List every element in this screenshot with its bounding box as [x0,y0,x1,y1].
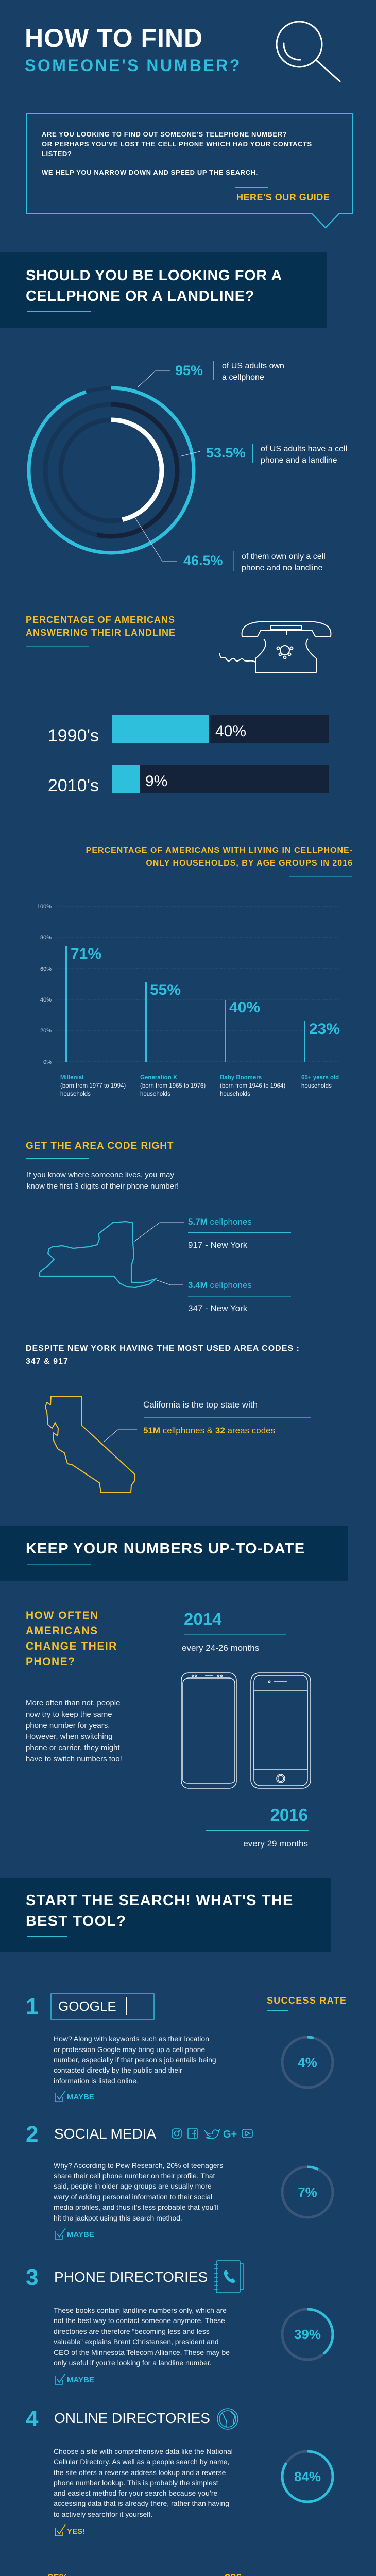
tool 4: online directories: YES! [67,2527,85,2536]
tool 4: online directories: Choose a site with comprehensive data like the National [54,2447,233,2455]
callout: 53.5%: of US adults have a cell [261,445,347,453]
callout: 95%: 95% [175,363,203,378]
heading: area code: GET THE AREA CODE RIGHT [26,1141,174,1151]
icon: magnifier [277,22,340,81]
bar chart: landline answering: 1990's [48,726,99,745]
title [25,24,242,75]
tool 4: online directories: phone number lookup. This is probably the simplest [54,2479,218,2487]
bar chart: landline answering: 2010's [48,776,99,795]
chart: age groups: 71% [71,945,101,962]
heading: area code: know the first 3 digits of their phone number! [27,1182,179,1191]
tool 3: phone directories: only useful if you’re looking for a landline number. [54,2359,212,2367]
tool 4: online directories: 4 [26,2406,39,2431]
map: New York [40,1222,156,1287]
heading: area code: If you know where someone lives, you may [27,1171,174,1179]
callout: 46.5%: of them own only a cell [242,552,326,561]
heading: how often change phone: CHANGE THEIR [26,1640,117,1652]
callout: California: 51M cellphones & 32 areas codes [143,1426,275,1435]
ring: 4%: 4% [298,2055,317,2070]
tool 3: phone directories: directories are therefore “becoming less and less [54,2327,210,2335]
callout: 917: 5.7M cellphones [188,1217,252,1227]
stat: 2014 [182,1609,286,1653]
heading: despite new york: DESPITE NEW YORK HAVING THE MOST USED AREA CODES : [26,1344,300,1353]
icon: phone book [214,2261,243,2293]
tool 2: social media: hit the jackpot using this search method. [54,2214,182,2222]
ring: 7% [282,2167,333,2217]
ring: 39% [282,2309,333,2360]
callout: 46.5% [135,518,326,572]
chart: age groups: 0% [43,1059,52,1065]
tool 3: phone directories: PHONE DIRECTORIES [54,2269,208,2285]
chart: age groups: 20% [40,1028,52,1034]
intro callout box: HERE'S OUR GUIDE [236,192,330,202]
tool 1: google: or profession Google may bring up a cell phone [54,2045,205,2054]
callout: 917 [134,1217,291,1250]
intro callout box: LISTED? [42,150,72,158]
tool 2: social media: media profiles, and thus it’s less probable that you’ll [54,2203,218,2211]
callout: 95%: of US adults own [222,362,284,370]
tool 1: google [26,1994,216,2102]
ring: 7%: 7% [298,2184,317,2200]
chart: age groups: 65+ years old [301,1075,339,1081]
chart: age groups: Baby Boomers [220,1075,262,1081]
chart: age groups: 80% [40,935,52,941]
heading: answering landline [26,615,176,646]
stat: 2014: every 24-26 months [182,1643,259,1653]
section header: cellphone or landline: SHOULD YOU BE LOOKING FOR A [26,267,282,284]
heading: area code [26,1141,179,1191]
callout: 53.5% [180,444,347,465]
chart: age groups: (born from 1977 to 1994) [60,1083,126,1089]
chart: age groups: 40% [40,997,52,1003]
bar chart: landline answering: 9% [145,773,167,790]
tool 4: online directories: Cellular Directory. As well as a people search by name, [54,2458,229,2466]
chart: age groups: households [60,1091,91,1097]
title: HOW TO FIND [25,24,203,53]
tool 3: phone directories: MAYBE [67,2376,94,2384]
callout: 347: 347 - New York [188,1303,248,1313]
heading: despite new york [26,1344,300,1366]
section header: cellphone or landline [0,252,327,328]
tool 2: social media: G+ [223,2129,237,2140]
stat: 2016: every 29 months [243,1839,308,1849]
tool 3: phone directories: not the best way to contact someone anymore. These [54,2316,225,2325]
tool 2: social media: SOCIAL MEDIA [54,2126,156,2142]
section header: keep numbers up-to-date: KEEP YOUR NUMBERS UP-TO-DATE [26,1540,305,1557]
tool 1: google: information is listed online. [54,2077,139,2085]
tool 2: social media: Why? According to Pew Research, 20% of teenagers [54,2161,223,2170]
tool 1: google: contacted directly by the public and their [54,2066,182,2074]
text block: keep number: However, when switching [26,1732,112,1741]
tool 2: social media [26,2122,252,2239]
tool 2: social media: MAYBE [67,2230,94,2239]
callout: 53.5%: 53.5% [206,445,246,461]
tool 2: social media: 2 [26,2122,38,2147]
heading: how often change phone: AMERICANS [26,1625,98,1637]
ring: 84%: 84% [294,2469,321,2484]
chart: age groups: 23% [309,1021,340,1038]
callout: California [104,1400,311,1442]
ring: 39%: 39% [294,2327,321,2342]
tool 4: online directories: to actively searchfor it yourself. [54,2510,152,2518]
tool 3: phone directories: CEO of the Minnesota Telecom Alliance. These may be [54,2348,230,2357]
chart: age groups: households [220,1091,250,1097]
heading: how often change phone: PHONE? [26,1656,76,1668]
tool 4: online directories [26,2406,238,2536]
text block: keep number [26,1699,122,1764]
tool 1: google: GOOGLE [58,1998,116,2014]
section header: start the search [0,1878,331,1952]
tool 3: phone directories: valuable” explains Brent Christensen, president and [54,2337,219,2346]
map: California [45,1396,135,1493]
ring chart: phone ownership [29,388,194,553]
bar chart: landline answering [48,715,329,795]
heading: answering landline: ANSWERING THEIR LANDLINE [26,628,176,638]
tool 4: online directories: accessing data that is already there, rather than having [54,2499,229,2507]
chart: age groups: (born from 1965 to 1976) [140,1083,206,1089]
text block: keep number: More often than not, people [26,1699,120,1707]
callout: 917: 917 - New York [188,1240,248,1250]
tool 4: online directories: the site offers a reverse address lookup and a reverse [54,2468,226,2477]
tool 3: phone directories: 3 [26,2265,38,2290]
tool 2: social media: share their cell phone number on their profile. That [54,2172,215,2180]
callout: 95%: a cellphone [222,373,264,382]
heading: success rate: SUCCESS RATE [267,1995,347,2006]
icon: globe [217,2409,238,2429]
icon: smartphones [181,1673,311,1788]
callout: 347: 3.4M cellphones [188,1280,252,1290]
heading: cellphone-only households: PERCENTAGE OF AMERICANS WITH LIVING IN CELLPHONE- [86,846,353,855]
stat: 2016: 2016 [270,1805,308,1824]
chart: age groups: 55% [150,981,181,998]
heading: despite new york: 347 & 917 [26,1357,69,1366]
tool 3: phone directories: These books contain landline numbers only, which are [54,2306,227,2314]
tool 4: online directories: and easiest method for your search because you’re [54,2489,218,2497]
icons: social networks [172,2128,252,2139]
chart: age groups: households [301,1083,332,1089]
callout: 46.5%: 46.5% [183,553,223,568]
text block: keep number: now try to keep the same [26,1710,112,1719]
section header: start the search: BEST TOOL? [26,1913,126,1929]
chart: age groups: (born from 1946 to 1964) [220,1083,285,1089]
intro callout box: ARE YOU LOOKING TO FIND OUT SOMEONE'S TELEPHONE NUMBER? [42,130,287,138]
bar chart: landline answering: 40% [215,723,246,740]
chart: age groups: households [140,1091,170,1097]
text block: keep number: have to switch numbers too! [26,1755,122,1764]
heading: how often change phone [26,1609,117,1668]
title: SOMEONE'S NUMBER? [25,56,242,75]
tool 2: social media: said, people in older age groups are usually more [54,2182,212,2190]
chart: age groups: 60% [40,966,52,972]
text block: keep number: phone number for years. [26,1721,110,1730]
section header: keep numbers up-to-date [0,1526,348,1581]
heading: answering landline: PERCENTAGE OF AMERICANS [26,615,175,625]
heading: cellphone-only households: ONLY HOUSEHOLDS, BY AGE GROUPS IN 2016 [146,859,353,868]
callout: 347 [157,1280,291,1313]
ring: 84% [282,2451,333,2502]
callout: 53.5%: phone and a landline [261,456,337,465]
heading: how often change phone: HOW OFTEN [26,1609,99,1621]
ring: 4% [282,2037,333,2088]
chart: age groups [37,904,340,1097]
intro callout box: OR PERHAPS YOU'VE LOST THE CELL PHONE WHICH HAD YOUR CONTACTS [42,140,312,148]
text block: keep number: phone or carrier, they might [26,1743,120,1752]
tool 1: google: 1 [26,1994,38,2019]
chart: age groups: 40% [229,999,260,1016]
intro callout box: WE HELP YOU NARROW DOWN AND SPEED UP THE SEARCH. [42,168,258,176]
callout: 46.5%: phone and no landline [242,564,323,572]
callout: California: California is the top state with [143,1400,258,1410]
heading: cellphone-only households [86,846,353,877]
chart: age groups: Generation X [140,1075,177,1081]
tool 1: google: How? Along with keywords such as their location [54,2035,209,2043]
intro callout box [26,114,352,228]
stat: 2016 [206,1805,309,1849]
tool 1: google: MAYBE [67,2093,94,2102]
section header: cellphone or landline: CELLPHONE OR A LANDLINE? [26,288,254,304]
tool 1: google: number, especially if that person’s job entails being [54,2056,216,2064]
chart: age groups: 100% [37,904,52,910]
section header: start the search: START THE SEARCH! WHAT'S THE [26,1892,294,1909]
tool 3: phone directories [26,2261,243,2384]
stat: 2014: 2014 [184,1609,222,1629]
tool 2: social media: wary of adding personal information to their social [53,2193,212,2201]
chart: age groups: Millenial [60,1075,83,1081]
icon: rotary telephone [219,621,331,672]
callout: 95% [138,361,284,387]
tool 4: online directories: ONLINE DIRECTORIES [54,2410,210,2426]
